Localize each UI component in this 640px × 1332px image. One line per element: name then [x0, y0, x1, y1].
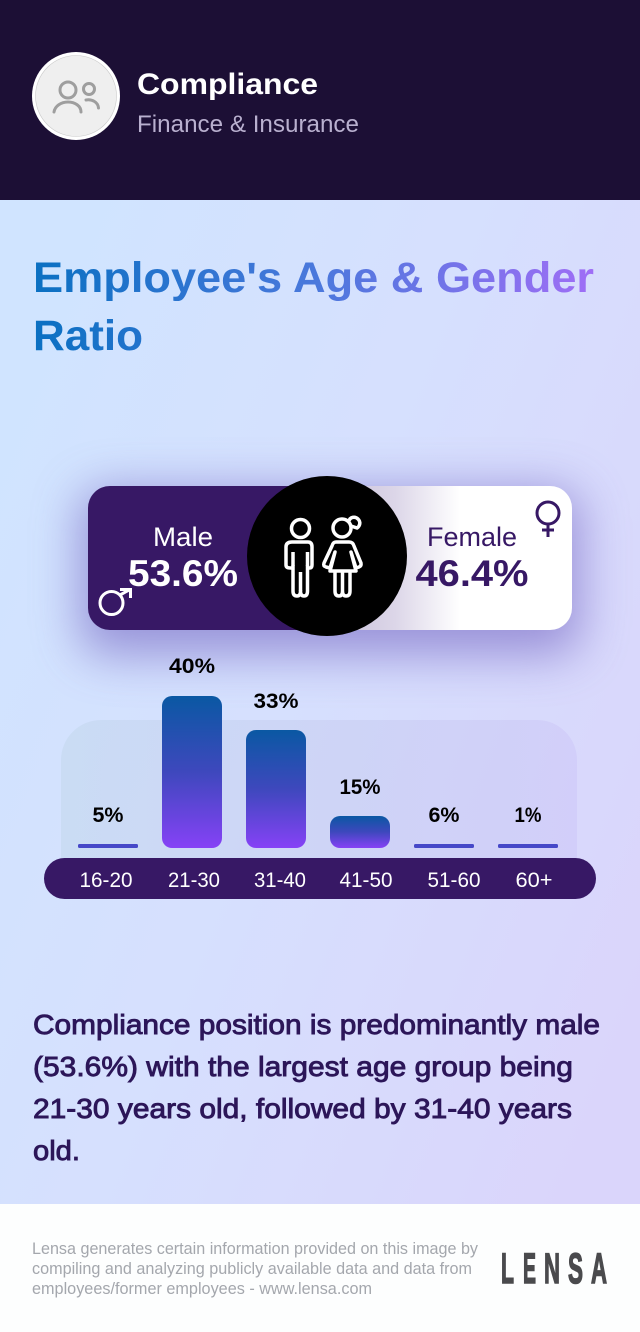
industry: Finance & Insurance: [137, 111, 359, 138]
icon: boy: [286, 520, 312, 596]
summary text: [33, 1009, 600, 1166]
bar 51-60: 6%: [428, 804, 460, 827]
summary text: 21-30 years old, followed by 31-40 years: [33, 1093, 572, 1124]
panel: male: Male: [153, 522, 213, 552]
bar 60+: 1%: [514, 804, 542, 827]
logo: LENSA: L: [501, 1245, 514, 1293]
panel: female: 46.4%: [416, 553, 528, 594]
background panel: [0, 200, 640, 1204]
bar 21-30: [162, 655, 222, 848]
age axis pill: 51-60: [428, 869, 480, 892]
icon: male symbol: [100, 590, 130, 614]
gender ratio card: [80, 476, 580, 655]
card shadow: [80, 490, 580, 655]
central black circle with people: [247, 476, 407, 636]
bar 41-50: 15%: [340, 776, 381, 799]
icon: people avatar: [32, 52, 120, 140]
age bar chart: [44, 655, 596, 899]
bar 16-20: [78, 804, 138, 848]
disclaimer: employees/former employees - www.lensa.com: [32, 1279, 372, 1298]
heading: [33, 254, 594, 360]
summary text: old.: [33, 1135, 80, 1166]
bar 60+: [498, 804, 558, 848]
bar 16-20: 5%: [92, 804, 124, 827]
age axis pill: 16-20: [80, 869, 132, 892]
footer band: [0, 1204, 640, 1332]
chart backdrop: [61, 720, 577, 860]
icon: girl: [324, 517, 361, 596]
disclaimer: compiling and analyzing publicly available data and data from: [32, 1259, 472, 1278]
logo: LENSA: [501, 1245, 607, 1293]
logo: LENSA: N: [544, 1245, 560, 1293]
panel: male: 53.6%: [128, 553, 238, 594]
age axis pill: 31-40: [254, 869, 306, 892]
heading: Employee's Age & Gender: [33, 254, 594, 302]
age axis pill: 41-50: [340, 869, 392, 892]
age axis pill: 60+: [516, 869, 552, 892]
icon: female symbol: [537, 502, 559, 537]
disclaimer: [32, 1239, 478, 1298]
bar 41-50: [330, 776, 390, 848]
bar 51-60: [414, 804, 474, 848]
logo: LENSA: A: [591, 1245, 607, 1293]
logo: LENSA: E: [523, 1245, 536, 1293]
bar 21-30: 40%: [169, 655, 215, 678]
disclaimer: Lensa generates certain information provided on this image by: [32, 1239, 478, 1258]
bar 31-40: [246, 690, 306, 848]
panel: male: [88, 486, 330, 630]
logo: LENSA: S: [568, 1245, 583, 1293]
age axis pill: 21-30: [168, 869, 220, 892]
age axis pill: [44, 858, 596, 899]
summary text: Compliance position is predominantly male: [33, 1009, 600, 1040]
panel: female: Female: [427, 522, 517, 552]
heading: Ratio: [33, 312, 143, 360]
panel: female: [330, 486, 572, 630]
job title: Compliance: [137, 68, 318, 101]
bar 31-40: 33%: [254, 690, 299, 713]
summary text: (53.6%) with the largest age group being: [33, 1051, 573, 1082]
header band: [0, 0, 640, 200]
